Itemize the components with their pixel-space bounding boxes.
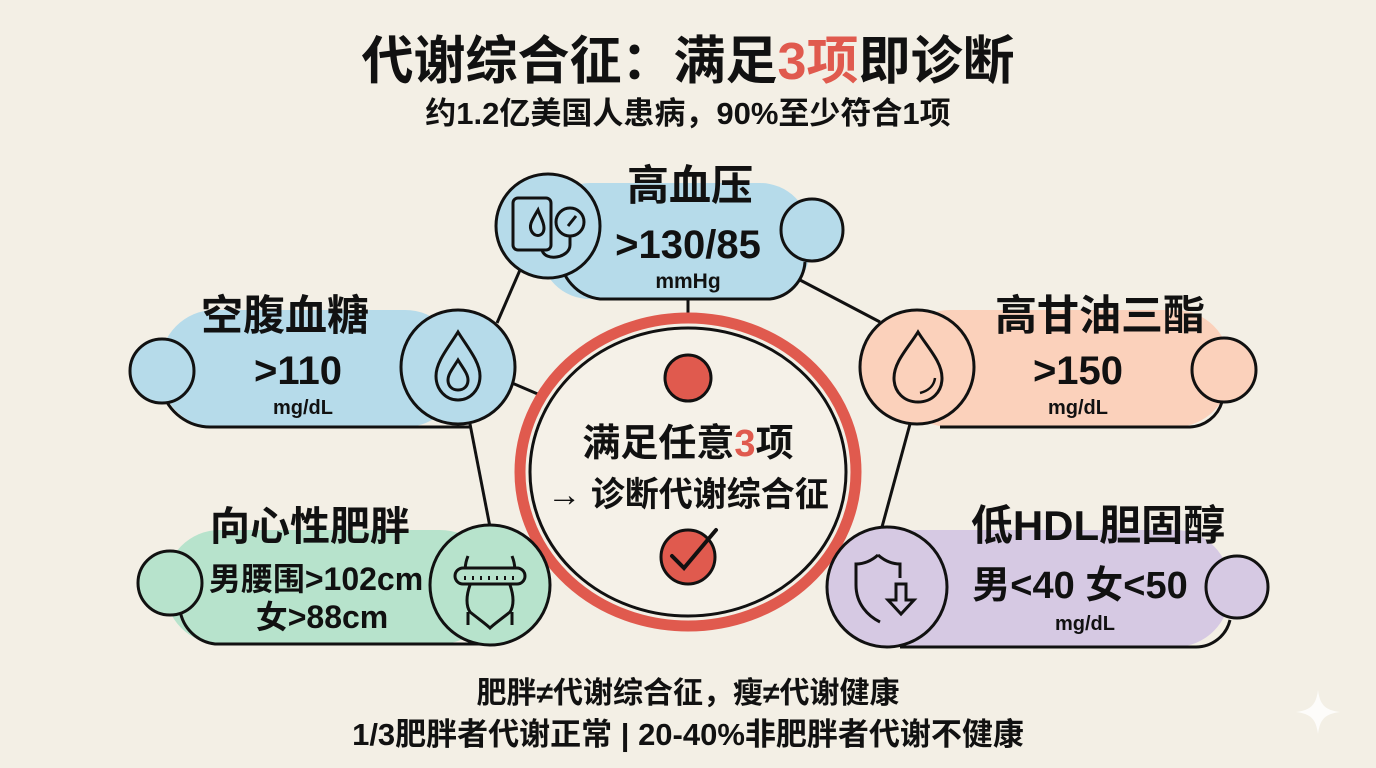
panel: fasting glucose (130, 292, 515, 427)
panel: low HDL: 男<40 女<50 (972, 565, 1188, 607)
icon: drop (401, 310, 515, 424)
panel: blood pressure: mmHg (655, 270, 721, 293)
icon: blood pressure monitor (496, 174, 600, 278)
panel: low HDL (827, 502, 1268, 647)
footer text (352, 677, 1024, 752)
subtitle: 约1.2亿美国人患病，90%至少符合1项 (425, 96, 951, 131)
footer text: 肥胖≠代谢综合征，瘦≠代谢健康 (477, 677, 899, 710)
panel: central obesity: 女>88cm (256, 599, 388, 635)
panel: central obesity (138, 505, 550, 645)
panel: fasting glucose: 空腹血糖 (201, 292, 369, 339)
panel: central obesity: 男腰围>102cm (209, 561, 423, 597)
icon: check (661, 530, 716, 584)
panel: fasting glucose: >110 (254, 349, 342, 393)
icon: red dot (665, 355, 711, 401)
title: 代谢综合征：满足3项即诊断 (362, 33, 1014, 91)
panel: triglycerides (860, 292, 1256, 427)
central circle (520, 318, 856, 626)
panel: triglycerides: >150 (1033, 349, 1123, 393)
icon: waist tape (430, 525, 550, 645)
panel: blood pressure: >130/85 (615, 223, 761, 267)
panel: blood pressure (496, 162, 843, 299)
panel: blood pressure: 高血压 (627, 162, 753, 209)
icon: shield down arrow (827, 527, 947, 647)
panel: triglycerides: mg/dL (1048, 397, 1108, 419)
panel: central obesity: 向心性肥胖 (210, 505, 410, 549)
panel: low HDL: 低HDL胆固醇 (971, 502, 1225, 549)
footer text: 1/3肥胖者代谢正常 | 20-40%非肥胖者代谢不健康 (352, 717, 1024, 752)
center text: 满足任意3项 (582, 423, 794, 465)
icon: sparkle (1296, 690, 1340, 734)
icon: oil drop (860, 310, 974, 424)
panel: low HDL: mg/dL (1055, 613, 1115, 635)
panel: triglycerides: 高甘油三酯 (995, 292, 1205, 339)
central circle: → 诊断代谢综合征 (547, 476, 829, 514)
panel: fasting glucose: mg/dL (273, 397, 333, 419)
connector lines (470, 270, 910, 572)
